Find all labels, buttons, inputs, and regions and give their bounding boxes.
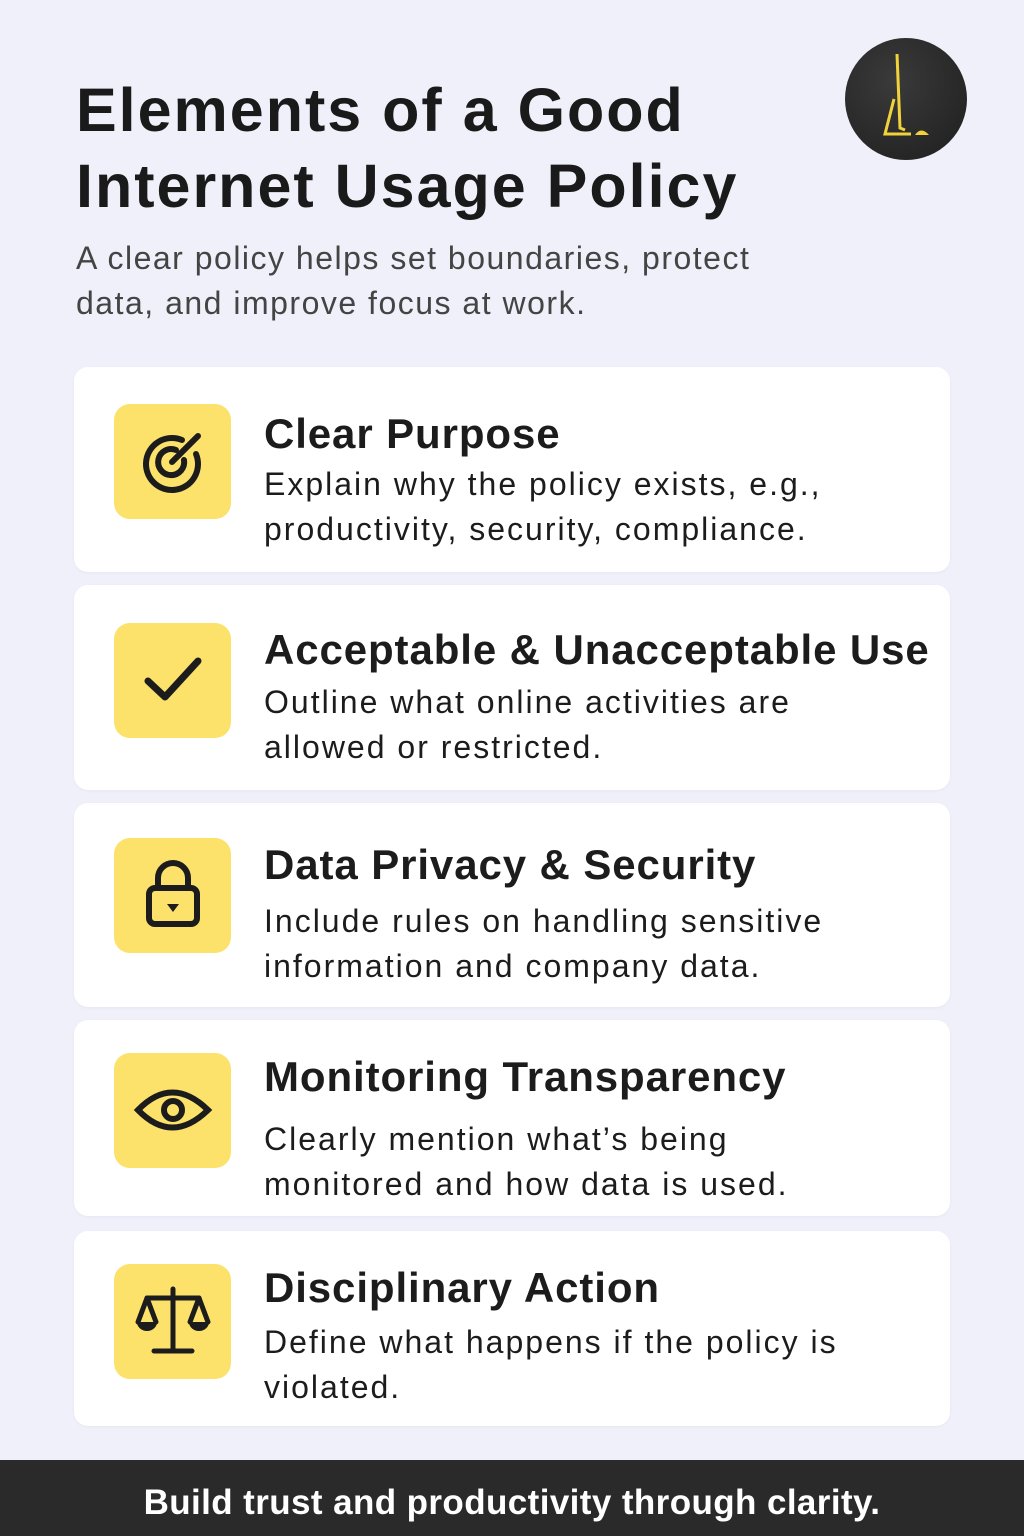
text: Clearly mention what’s being: [264, 1121, 729, 1157]
panel: disciplinary: [74, 1231, 950, 1426]
panel: acceptable use: [74, 585, 950, 790]
icon: scales: [114, 1264, 231, 1379]
footer banner: [0, 1460, 1024, 1536]
text: Explain why the policy exists, e.g.,: [264, 466, 822, 502]
icon: check: [114, 623, 231, 738]
text: [264, 684, 791, 765]
text: monitored and how data is used.: [264, 1166, 789, 1202]
subtitle: [76, 240, 750, 321]
icon: target: [114, 404, 231, 519]
icon: lock: [114, 838, 231, 953]
subtitle: data, and improve focus at work.: [76, 285, 586, 321]
text: information and company data.: [264, 948, 761, 984]
title: Internet Usage Policy: [76, 152, 738, 220]
text: productivity, security, compliance.: [264, 511, 808, 547]
panel: clear purpose: [74, 367, 950, 572]
text: Define what happens if the policy is: [264, 1324, 838, 1360]
subtitle: A clear policy helps set boundaries, protect: [76, 240, 750, 276]
text: [264, 1121, 789, 1202]
heading: Disciplinary Action: [264, 1264, 660, 1311]
logo: computer icon: [845, 38, 967, 160]
text: [264, 466, 822, 547]
panel: data privacy: [74, 803, 950, 1007]
text: Include rules on handling sensitive: [264, 903, 823, 939]
text: [264, 903, 823, 984]
footer banner: Build trust and productivity through clarity.: [144, 1483, 880, 1522]
title: Elements of a Good: [76, 76, 685, 144]
panel: monitoring: [74, 1020, 950, 1216]
text: allowed or restricted.: [264, 729, 603, 765]
title: [76, 76, 738, 220]
icon: eye: [114, 1053, 231, 1168]
text: [264, 1324, 838, 1405]
heading: Monitoring Transparency: [264, 1053, 786, 1100]
text: Outline what online activities are: [264, 684, 791, 720]
heading: Acceptable & Unacceptable Use: [264, 626, 930, 673]
heading: Data Privacy & Security: [264, 841, 756, 888]
text: violated.: [264, 1369, 401, 1405]
heading: Clear Purpose: [264, 410, 560, 457]
